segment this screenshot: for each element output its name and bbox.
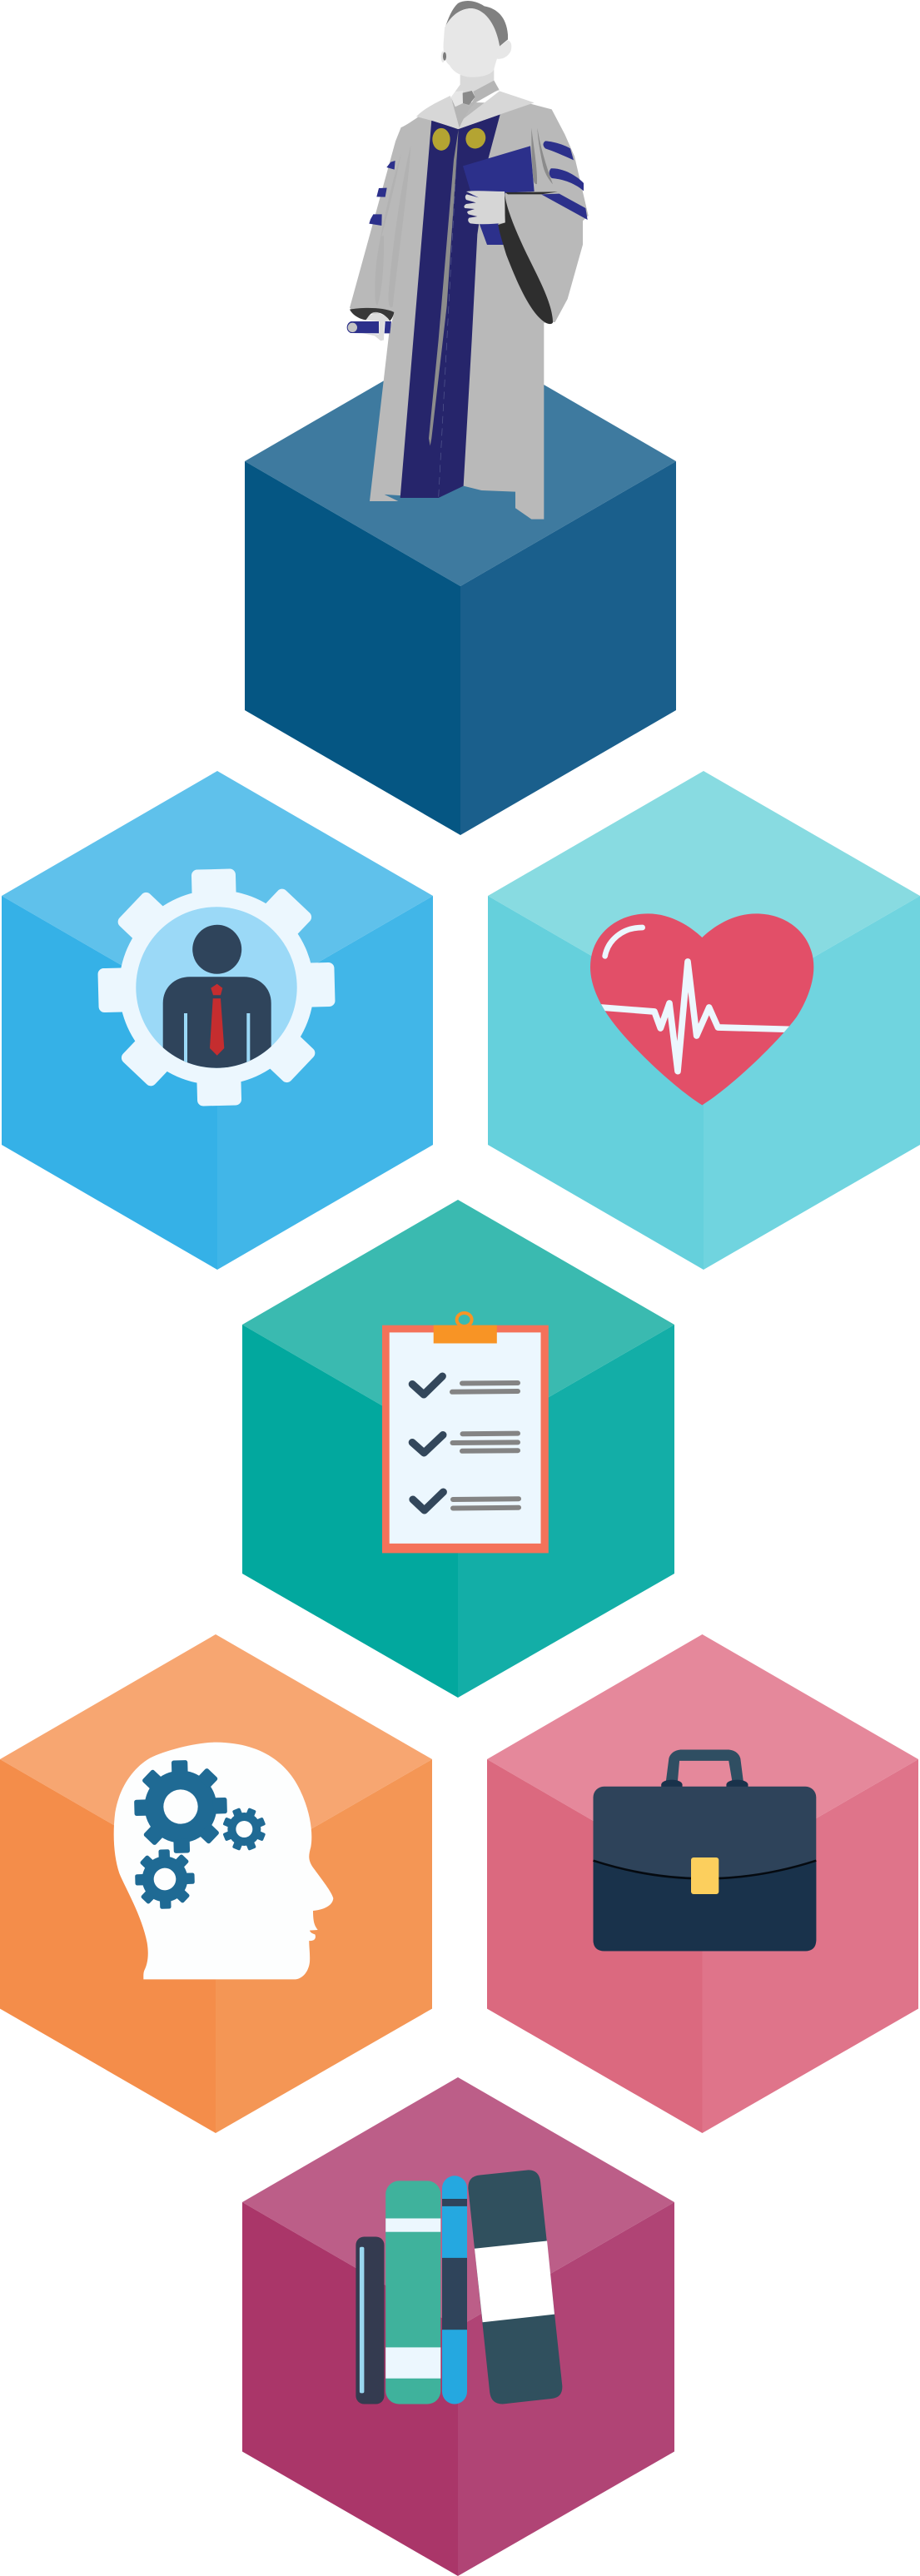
icon: clipboard checklist [382, 1313, 549, 1553]
panel: top navy hexagon cube [245, 336, 676, 835]
panel: green hexagon cube [242, 1200, 674, 1698]
icon: graduate figure in academic gown [347, 1, 589, 520]
icon: stack of books [356, 2170, 562, 2404]
panel: teal hexagon cube [488, 771, 920, 1270]
panel: blue hexagon cube [2, 771, 433, 1270]
panel: orange hexagon cube [0, 1634, 432, 2133]
panel: magenta hexagon cube [242, 2077, 674, 2576]
icon: head silhouette with gears [114, 1743, 333, 1979]
icon: briefcase [593, 1749, 816, 1951]
icon: person in gear [95, 866, 338, 1109]
icon: heart with pulse line [590, 913, 813, 1105]
panel: pink hexagon cube [487, 1634, 918, 2133]
